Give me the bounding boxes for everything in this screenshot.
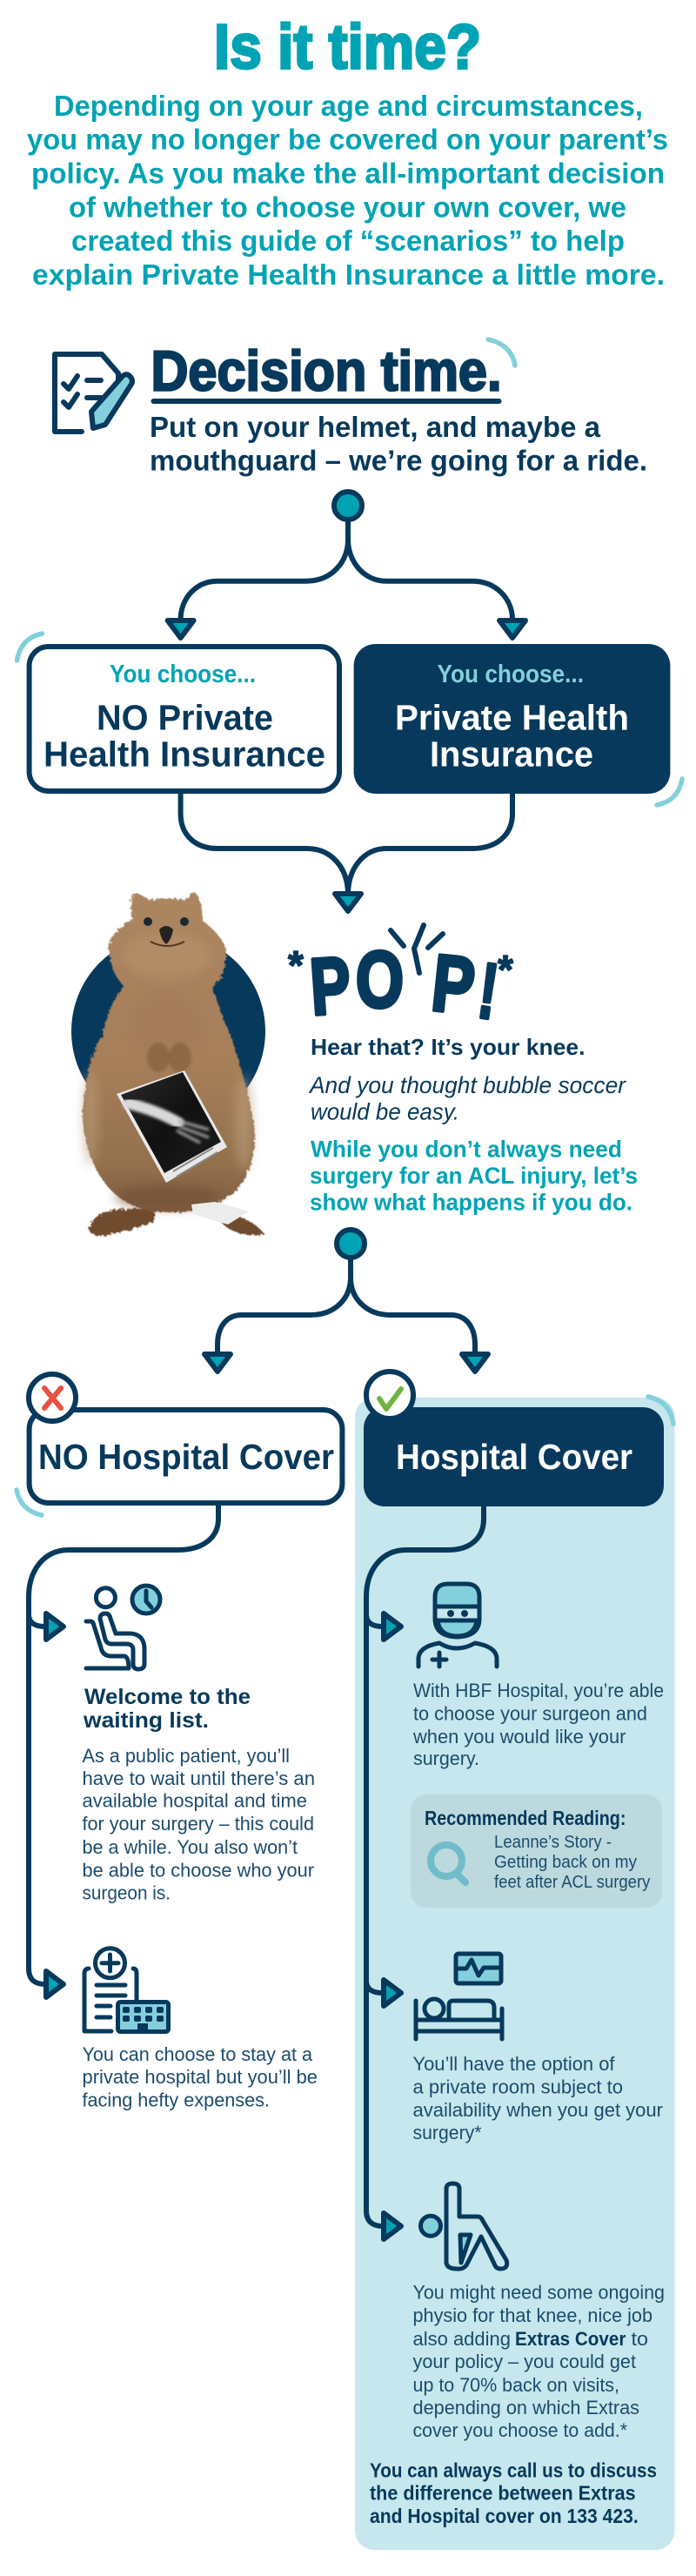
heading: waiting list: waiting list. <box>83 1708 209 1733</box>
text: physio and extras: physio for that knee, nice job <box>412 2304 652 2326</box>
text: public patient: for your surgery – this could <box>82 1813 314 1835</box>
text: private room: surgery* <box>412 2122 482 2143</box>
pop lettering: P <box>307 941 353 1032</box>
text: physio and extras: cover you choose to add.* <box>412 2419 627 2441</box>
text: physio and extras: your policy – you could get <box>412 2351 636 2372</box>
flow connector: second split <box>204 1230 488 1372</box>
heading: Decision time: Decision time. <box>151 339 501 402</box>
panel: no private health insurance <box>17 634 339 791</box>
flow connector: split to two choices <box>168 492 525 638</box>
text: physio and extras: to <box>632 2328 648 2350</box>
text: physio and extras: depending on which Extras <box>412 2397 639 2418</box>
icon: hospital document and building <box>84 1949 169 2032</box>
bandage <box>191 1202 249 1224</box>
illustration: quokka holding x-ray <box>71 892 265 1236</box>
text: private hospital expenses <box>82 2043 318 2111</box>
text: call to action: and Hospital cover on 133 423. <box>370 2505 639 2527</box>
icon: green tick badge <box>366 1372 413 1419</box>
panel: no private health insurance: Health Insurance <box>44 735 325 775</box>
pop lettering: * <box>498 947 513 992</box>
text: private room: You’ll have the option of <box>412 2053 615 2075</box>
text: physio and extras: You might need some ongoing <box>412 2282 665 2304</box>
pop lettering: O <box>356 936 404 1024</box>
text: private hospital expenses: private hospital but you’ll be <box>82 2066 318 2088</box>
text: call to action: You can always call us to discuss <box>370 2459 657 2482</box>
text: choose your surgeon: when you would like your <box>412 1726 626 1748</box>
fur shading <box>84 933 252 1209</box>
heading: waiting list: Welcome to the <box>84 1685 251 1709</box>
text: hear that: Hear that? It’s your knee. <box>311 1034 585 1060</box>
header: hospital cover <box>364 1397 673 1506</box>
flow connector: merge <box>181 794 512 911</box>
header: no hospital cover: NO Hospital Cover <box>38 1437 334 1477</box>
text: private room <box>412 2053 663 2143</box>
icon: physio stretch <box>421 2184 507 2269</box>
callout: recommended reading: Leanne’s Story - <box>494 1833 612 1852</box>
callout: recommended reading <box>411 1794 662 1908</box>
callout: recommended reading: Recommended Reading: <box>425 1807 626 1829</box>
text: physio and extras: up to 70% back on visits, <box>412 2374 619 2396</box>
text: private hospital expenses: facing hefty expenses. <box>82 2090 270 2111</box>
callout: recommended reading: feet after ACL surgery <box>494 1873 650 1892</box>
icon: surgeon <box>418 1584 497 1667</box>
icon: checklist and pencil <box>55 354 132 432</box>
text: physio and extras <box>412 2282 665 2441</box>
intro text: Depending on your age and circumstances, <box>54 90 643 122</box>
panel: no private health insurance: NO Private <box>97 697 273 737</box>
flow connector: no hospital cover path <box>29 1506 218 1997</box>
flow connector: hospital cover path <box>366 1506 484 2239</box>
panel: private health insurance: Private Health <box>395 697 629 737</box>
text: ACL injury: show what happens if you do. <box>310 1190 632 1216</box>
quokka face <box>144 917 189 946</box>
text: public patient <box>82 1745 315 1904</box>
icon: red cross badge <box>29 1374 76 1421</box>
text: choose your surgeon: With HBF Hospital, you’re able <box>413 1680 664 1701</box>
quokka body <box>83 892 255 1212</box>
header: no hospital cover <box>17 1410 342 1515</box>
icon: hospital bed and monitor <box>416 1954 502 2039</box>
text: public patient: As a public patient, you’ll <box>82 1745 290 1767</box>
text: private room: a private room subject to <box>412 2076 623 2098</box>
icon: waiting room chair and clock <box>86 1586 160 1669</box>
text: private hospital expenses: You can choose to stay at a <box>82 2043 313 2065</box>
pop lettering <box>288 925 513 1036</box>
heading: waiting list <box>83 1685 251 1733</box>
text: choose your surgeon: to choose your surgeon and <box>413 1703 647 1725</box>
paws <box>147 1043 191 1072</box>
callout: recommended reading: Getting back on my <box>494 1853 637 1872</box>
text: private room: availability when you get your <box>412 2099 663 2121</box>
text: bubble soccer: And you thought bubble soccer <box>308 1072 626 1098</box>
pop lettering: * <box>288 943 304 988</box>
text: public patient: have to wait until there’s an <box>82 1768 315 1789</box>
intro text <box>27 90 668 291</box>
subheading: mouthguard – we’re going for a ride. <box>150 444 647 476</box>
header: hospital cover: Hospital Cover <box>396 1437 632 1477</box>
quokka feet <box>89 1208 264 1236</box>
text: physio and extras: Extras Cover <box>515 2328 626 2350</box>
text: public patient: be able to choose who your <box>82 1860 314 1882</box>
text: choose your surgeon <box>412 1680 664 1769</box>
intro text: created this guide of “scenarios” to help <box>71 225 625 257</box>
panel: hospital cover background <box>355 1398 675 2550</box>
panel: private health insurance: Insurance <box>430 735 593 775</box>
text: public patient: available hospital and time <box>82 1790 307 1812</box>
panel: private health insurance <box>354 644 682 805</box>
text: public patient: be a while. You also won’t <box>82 1836 298 1858</box>
text: ACL injury: surgery for an ACL injury, let’s <box>310 1163 638 1189</box>
text: ACL injury: While you don’t always need <box>311 1136 622 1162</box>
panel: no private health insurance: You choose... <box>110 661 256 688</box>
pop lettering: P <box>428 938 478 1031</box>
intro text: of whether to choose your own cover, we <box>69 191 626 223</box>
icon: magnifier <box>431 1845 465 1882</box>
text: physio and extras: also adding <box>412 2328 511 2350</box>
text: public patient: surgeon is. <box>82 1882 171 1904</box>
subheading: Put on your helmet, and maybe a <box>150 411 601 443</box>
x-ray <box>117 1070 227 1183</box>
intro text: policy. As you make the all-important decision <box>31 157 665 190</box>
text: call to action: the difference between Extras <box>370 2482 636 2505</box>
text: bubble soccer: would be easy. <box>311 1099 459 1125</box>
text: ACL injury <box>310 1136 638 1216</box>
intro text: explain Private Health Insurance a little more. <box>32 258 665 291</box>
intro text: you may no longer be covered on your parent’s <box>27 124 668 155</box>
title: Is it time? <box>214 12 481 82</box>
panel: private health insurance: You choose... <box>437 661 584 688</box>
pop lettering: ! <box>473 948 503 1036</box>
text: bubble soccer <box>308 1072 626 1125</box>
text: call to action <box>370 2459 657 2527</box>
subheading <box>150 411 647 476</box>
text: choose your surgeon: surgery. <box>413 1748 479 1769</box>
